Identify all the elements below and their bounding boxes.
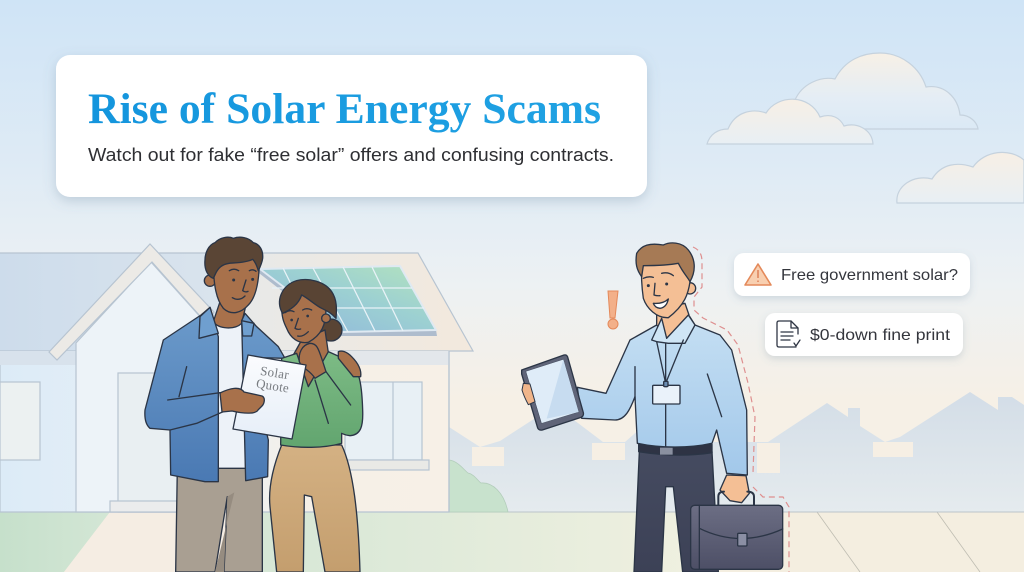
tablet (522, 355, 583, 430)
icon: document with check (777, 321, 800, 347)
quote paper: Solar (259, 363, 291, 382)
exclamation mark (608, 291, 618, 329)
ground: lawn and walkway (0, 512, 1024, 572)
lanyard and badge (653, 340, 683, 404)
neck (293, 330, 328, 387)
collar (652, 315, 695, 343)
jacket (145, 307, 218, 482)
callout: free government solar (734, 253, 970, 296)
hand on briefcase handle (720, 475, 749, 503)
quote paper (233, 355, 306, 439)
right window (340, 382, 429, 470)
neck (657, 303, 689, 338)
hair bun (320, 319, 342, 341)
person: woman in green (270, 280, 363, 572)
trousers (270, 445, 360, 572)
subtitle: Watch out for fake “free solar” offers and confusing contracts. (88, 145, 614, 165)
solar panel (255, 266, 437, 336)
quote paper: Quote (255, 376, 290, 396)
trousers (634, 452, 718, 572)
person: salesman (522, 243, 783, 572)
head (636, 243, 696, 318)
briefcase (691, 492, 783, 569)
person: man with jacket (145, 237, 285, 572)
left window (0, 382, 40, 460)
sweater (281, 352, 363, 447)
callout: free government solar: Free government solar? (781, 267, 958, 284)
trousers (176, 467, 262, 572)
title card (56, 55, 647, 197)
house gable (49, 244, 230, 512)
neck and t-shirt (213, 322, 246, 468)
shirt (577, 316, 747, 475)
callout: $0-down fine print (765, 313, 963, 356)
dashed red outline around salesman (683, 247, 789, 572)
fingers holding tablet (522, 383, 535, 405)
icon: warning triangle (745, 264, 771, 285)
clouds (707, 53, 1024, 203)
callout: $0-down fine print: $0-down fine print (810, 327, 951, 344)
head (282, 290, 326, 343)
title: Rise of Solar Energy Scams (88, 86, 601, 133)
hands (338, 351, 361, 377)
house (0, 244, 473, 512)
belt (639, 444, 712, 455)
head (204, 237, 263, 313)
bush (449, 460, 508, 512)
silhouette neighbourhood houses (449, 392, 1024, 512)
front door (118, 373, 188, 512)
man's hand holding paper (220, 388, 264, 413)
